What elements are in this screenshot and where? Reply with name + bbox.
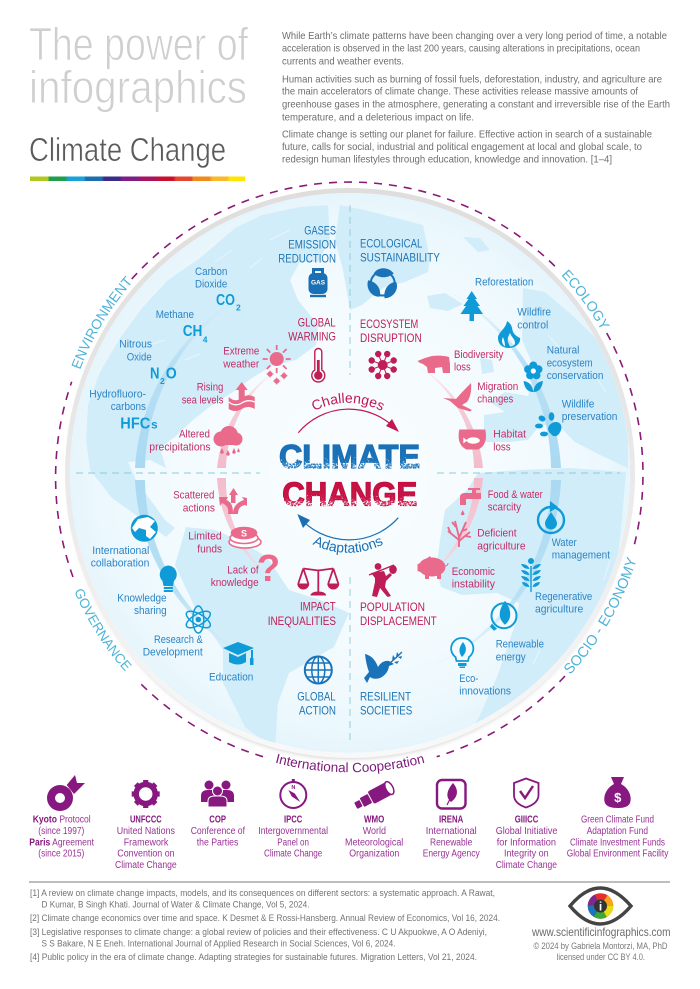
challenge: biodiversity loss: Biodiversity (454, 349, 504, 361)
quadrant heading: gases emission reduction: EMISSION (288, 238, 336, 252)
adaptation: knowledge sharing: Knowledge (117, 592, 167, 604)
gas label: nitrous oxide: Oxide (127, 351, 152, 363)
challenge: migration changes: Migration (477, 381, 518, 393)
icon: rising water (229, 382, 255, 411)
quadrant heading: global action: GLOBAL (297, 690, 336, 704)
organisation: COP (191, 780, 245, 848)
quadrant heading: gases emission reduction (278, 223, 336, 266)
organisation: climate funds (567, 777, 668, 860)
icon: rain cloud (214, 426, 242, 456)
quadrant heading: impact inequalities: INEQUALITIES (268, 614, 336, 628)
gas label: nitrous oxide: N (150, 365, 160, 382)
icon: money bag: $ (614, 790, 622, 805)
icon: graduation cap (223, 642, 254, 665)
pink challenge ring (217, 363, 483, 588)
text: UNFCCC: UNFCCC (130, 815, 162, 826)
adaptation: research and development (143, 634, 203, 659)
text: climate funds: Global Environment Facility (567, 849, 668, 860)
references: [2] Climate change economics over time and space. K Desmet & E Rossi-Hansberg. Annual Review of Economics, Vol 16, 2024. (30, 913, 500, 924)
gas label: carbon dioxide (195, 266, 241, 313)
icon: stacked coins: S (241, 528, 247, 538)
credit text: © 2024 by Gabriela Montorzi, MA, PhD (534, 941, 668, 952)
icon: telescope (352, 780, 396, 812)
text: Kyoto (29, 815, 94, 860)
introduction text: Human activities such as burning of fossil fuels, deforestation, industry, and agriculture are (282, 74, 662, 85)
challenge: extreme weather: weather (222, 358, 260, 370)
challenge: scattered actions: Scattered (173, 490, 214, 502)
challenge: deficient agriculture (477, 528, 526, 552)
gas label: nitrous oxide: 2 (160, 376, 165, 386)
quadrant heading: global warming: WARMING (288, 329, 336, 343)
adaptation: wildlife preservation (562, 398, 617, 423)
challenge: lack of knowledge: Lack of (227, 564, 259, 576)
adaptation: natural ecosystem conservation (547, 345, 603, 382)
adaptation: renewable energy: Renewable (496, 638, 544, 650)
challenge: habitat loss: loss (493, 441, 511, 453)
quadrant heading: impact inequalities (268, 600, 336, 628)
text: WMO (345, 815, 403, 860)
adaptation: wildlife preservation: preservation (562, 411, 617, 423)
title: infographics (29, 61, 247, 113)
icon: light bulb (160, 566, 177, 592)
ring label: international cooperation: International Cooperation (276, 754, 424, 774)
text: GIIICC: Climate Change (496, 860, 557, 871)
icon: flame (498, 321, 520, 348)
challenge: limited funds (188, 531, 223, 555)
text: IPCC: Intergovernmental (258, 826, 328, 837)
organisation: GIIICC (496, 778, 558, 871)
text: UNFCCC: Convention on (117, 849, 175, 860)
adaptation: water management (552, 537, 610, 562)
challenge: economic instability (452, 566, 496, 591)
text: IRENA: Renewable (430, 837, 473, 848)
adaptation: education: Education (209, 671, 253, 683)
gas label: nitrous oxide (119, 339, 177, 386)
credit text: licensed under CC BY 4.0. (557, 952, 645, 963)
quadrant heading: resilient societies: RESILIENT (360, 690, 412, 704)
adaptation: renewable energy: energy (496, 651, 526, 663)
adaptation: regenerative agriculture: Regenerative (535, 591, 592, 603)
icon: water cycle (538, 501, 564, 533)
challenge: scattered actions: actions (183, 502, 216, 514)
gas label: carbon dioxide: Dioxide (195, 279, 227, 291)
text: IPCC: Panel on (277, 837, 309, 848)
quadrant heading: population displacement: DISPLACEMENT (360, 614, 437, 628)
organisation: WMO (345, 780, 403, 860)
title (29, 18, 248, 113)
quadrant heading: global warming: GLOBAL (298, 316, 336, 330)
text: IPCC: Climate Change (264, 849, 323, 860)
quadrant heading: ecological sustainability: SUSTAINABILITY (360, 251, 440, 265)
challenge: lack of knowledge: knowledge (211, 577, 259, 589)
organisation: UNFCCC (115, 774, 177, 871)
gas label: nitrous oxide: Nitrous (119, 339, 153, 351)
icon: shield with check (514, 778, 538, 808)
credit text: www.scientificinfographics.com (531, 925, 670, 939)
gas label: hydrofluorocarbons (89, 388, 158, 432)
challenge: biodiversity loss: loss (454, 362, 471, 374)
adaptation: water management: management (552, 550, 610, 562)
organisation: Kyoto and Paris (29, 775, 94, 860)
international cooperation row (29, 774, 668, 871)
globe rim (68, 190, 632, 756)
icon: polar bear (418, 356, 450, 373)
icon: stacked coins (229, 528, 261, 548)
quadrant heading: ecosystem disruption (360, 317, 422, 345)
challenge: food and water scarcity (488, 489, 543, 514)
text: Kyoto: (since 2015) (38, 849, 84, 860)
icon: eco light bulb (451, 638, 473, 668)
adaptation: reforestation: Reforestation (475, 277, 533, 289)
quadrant heading: resilient societies: SOCIETIES (360, 704, 412, 718)
icon: thermometer (312, 348, 325, 382)
introduction text: acceleration is observed in the last 200 years, causing alterations in precipitations, ocean (282, 44, 640, 55)
header: title block (29, 18, 248, 181)
challenge: altered precipitations (149, 429, 211, 454)
adaptation: international collaboration: collaboration (91, 558, 149, 570)
text: IRENA (423, 815, 480, 860)
centre: climate change wordmark (279, 392, 420, 555)
globe panel (68, 190, 632, 759)
globe drop shadow (69, 197, 631, 759)
text: IRENA: IRENA (439, 815, 463, 826)
ring label: environment: ENVIRONMENT (72, 276, 131, 369)
icon: world grid globe (305, 656, 332, 684)
icon: peace dove (364, 652, 402, 683)
logo: eye (570, 888, 631, 924)
quadrant heading: ecological sustainability: ECOLOGICAL (360, 237, 423, 251)
challenge: migration changes (477, 381, 518, 406)
gas label: hydrofluorocarbons: s (151, 417, 158, 431)
challenge: altered precipitations: precipitations (149, 442, 211, 454)
text: IRENA: Energy Agency (423, 849, 480, 860)
icon: piggy bank (418, 556, 448, 579)
references: S S Bakare, N E Eneh. International Journal of Applied Research in Social Sciences, Vol 6, 2024. (42, 938, 396, 950)
text: COP: COP (209, 815, 226, 826)
adaptations arrow: Adaptations (312, 537, 383, 555)
text: GIIICC: for Information (497, 837, 556, 848)
adaptation: knowledge sharing: sharing (134, 605, 167, 617)
ring label: ecology: ECOLOGY (562, 269, 610, 328)
icon: water tap (460, 488, 481, 515)
text: IPCC: IPCC (284, 815, 302, 826)
adaptation: eco-innovations: Eco- (459, 673, 479, 685)
introduction text: redesign human lifestyles through education, knowledge and innovation. [1–4] (282, 155, 612, 166)
references: [4] Public policy in the era of climate change. Adapting strategies for sustainable futures. Migration Letters, Vol 21, 2024. (30, 952, 477, 963)
icon: compass: N (291, 785, 295, 791)
text: Kyoto: Kyoto Protocol (33, 815, 91, 826)
quadrant heading: impact inequalities: IMPACT (300, 600, 336, 614)
title: The power of (29, 18, 248, 70)
references: [3] Legislative responses to climate change: a global review of policies and their effectiveness. C U Akpuokwe, A O Adeniyi, (30, 927, 487, 938)
challenge: migration changes: changes (477, 394, 514, 406)
quadrant heading: global warming (288, 316, 336, 343)
text: WMO: WMO (364, 815, 385, 826)
icon: pine tree (460, 291, 483, 321)
adaptation: natural ecosystem conservation: Natural (547, 345, 579, 357)
rainbow bar (30, 176, 245, 181)
text: Kyoto: (since 1997) (38, 826, 84, 837)
challenge: limited funds: funds (197, 543, 223, 555)
text: WMO: Organization (349, 849, 399, 860)
text: Kyoto: Paris Agreement (29, 837, 94, 848)
quadrant heading: global action: ACTION (299, 704, 336, 718)
adaptation: eco-innovations (459, 673, 512, 697)
icon: ecosystem network (369, 351, 396, 379)
gas label: carbon dioxide: Carbon (195, 266, 227, 278)
icon: gas cylinder (308, 268, 328, 297)
challenge: scattered actions (173, 490, 216, 514)
subtitle: Climate Change (29, 131, 226, 168)
icon: dead tree (448, 521, 471, 547)
adaptation: eco-innovations: innovations (459, 685, 512, 697)
introduction text: While Earth’s climate patterns have been changing over a very long period of time, a notable (282, 31, 667, 42)
quadrant heading: global action (297, 690, 336, 718)
word: climate: CLIMATE (279, 438, 420, 475)
challenges arrow (298, 392, 399, 434)
text: climate funds (567, 815, 668, 860)
adaptation: wildfire control (517, 307, 551, 331)
adaptations arrow (297, 514, 399, 555)
challenge: biodiversity loss (454, 349, 504, 374)
icon: fish bowl (459, 430, 486, 450)
introduction text: greenhouse gases in the atmosphere, generating a constant and irreversible rise of the Earth (282, 100, 670, 111)
quadrant heading: population displacement: POPULATION (360, 600, 425, 614)
globe ocean and land (70, 193, 630, 753)
icon: recycle leaves (364, 268, 400, 301)
adaptation: natural ecosystem conservation: conservation (547, 370, 603, 382)
adaptation: renewable energy (496, 638, 544, 663)
challenge: food and water scarcity: scarcity (488, 502, 522, 514)
adaptation: wildfire control: Wildfire (517, 307, 551, 319)
gas label: carbon dioxide: 2 (236, 303, 241, 313)
icon: diverging arrows (219, 488, 247, 514)
text: UNFCCC: United Nations (117, 826, 175, 837)
adaptation: natural ecosystem conservation: ecosystem (547, 357, 593, 369)
challenge: rising sea levels: sea levels (182, 394, 224, 406)
logo: eye: i (599, 900, 602, 914)
quadrant heading: ecological sustainability (360, 237, 440, 265)
quadrant heading: ecosystem disruption: DISRUPTION (360, 331, 422, 345)
references: D Kumar, B Singh Khati. Journal of Water & Climate Change, Vol 5, 2024. (42, 900, 310, 910)
challenge: rising sea levels (182, 381, 224, 406)
credit text (531, 925, 670, 963)
gas label: methane: Methane (156, 309, 194, 321)
adaptation: wildlife preservation: Wildlife (562, 398, 594, 410)
gas label: methane: 4 (203, 334, 208, 344)
introduction text: Climate change is setting our planet for failure. Effective action in search of a sustainable (282, 129, 652, 140)
adaptation: international collaboration (91, 545, 149, 570)
challenge: extreme weather (222, 346, 260, 370)
blue adaptation ring (135, 285, 561, 670)
text: WMO: Meteorological (345, 837, 403, 848)
icon: scales of justice (297, 568, 339, 596)
gas label: hydrofluorocarbons: Hydrofluoro- (89, 388, 146, 400)
text: COP (191, 815, 245, 848)
challenge: habitat loss: Habitat (493, 429, 526, 441)
ring label: governance: GOVERNANCE (76, 589, 132, 672)
introduction text: the main accelerators of climate change. These activities release massive amounts of (282, 87, 638, 98)
challenges arrow: Challenges (312, 392, 384, 410)
quadrant heading: ecosystem disruption: ECOSYSTEM (360, 317, 418, 331)
icon: medal (47, 775, 85, 811)
icon: renewable energy leaf (490, 601, 516, 631)
challenge: extreme weather: Extreme (223, 346, 259, 358)
text: GIIICC (496, 815, 558, 871)
icon: wheat sprig (521, 558, 541, 592)
ring label: socio-economy: SOCIO - ECONOMY (564, 556, 636, 674)
icon: flying bird (443, 383, 472, 412)
text: COP: the Parties (197, 837, 238, 848)
gas label: carbon dioxide: CO (216, 292, 235, 309)
adaptation: research and development: Research & (154, 634, 203, 646)
icon: people (201, 780, 234, 807)
text: UNFCCC (115, 815, 177, 871)
introduction text: currents and weather events. (282, 57, 404, 68)
axis dashes (76, 205, 620, 745)
icon: flower (524, 362, 543, 392)
adaptation: regenerative agriculture (535, 591, 592, 616)
text: GIIICC: Global Initiative (496, 826, 558, 837)
adaptation: regenerative agriculture: agriculture (535, 604, 583, 616)
quadrant heading: gases emission reduction: REDUCTION (278, 252, 336, 266)
icon: gas cylinder: GAS (311, 280, 326, 286)
quadrant heading: gases emission reduction: GASES (304, 223, 336, 237)
challenge: deficient agriculture: Deficient (477, 528, 517, 540)
icon: gear (126, 774, 165, 814)
challenge: food and water scarcity: Food & water (488, 489, 543, 501)
text: UNFCCC: Framework (124, 837, 168, 848)
challenge: economic instability: Economic (452, 566, 496, 578)
icon: hiker with bundle (369, 563, 397, 597)
text: GIIICC: Integrity on (504, 849, 549, 860)
references: [1] A review on climate change impacts, models, and its consequences on different sectors: a systematic approach. A Rawat, (30, 888, 495, 899)
icon: atom (184, 606, 213, 633)
gas label: methane: CH (183, 323, 202, 340)
text: climate funds: Green Climate Fund (581, 815, 654, 826)
gas label: hydrofluorocarbons: carbons (111, 401, 147, 413)
icon: leaf in square (437, 780, 466, 808)
gas label: methane (156, 309, 208, 344)
icon: paw print (535, 412, 561, 436)
adaptation: knowledge sharing (117, 592, 167, 617)
challenge: altered precipitations: Altered (179, 429, 210, 441)
organisation: IRENA (423, 780, 480, 860)
adaptation: water management: Water (552, 537, 577, 549)
organisation: IPCC (258, 779, 328, 860)
text: GIIICC: GIIICC (515, 815, 538, 826)
icon: earth (131, 515, 158, 542)
word: change: CHANGE (282, 476, 417, 512)
text: IPCC (258, 815, 328, 860)
gas label: nitrous oxide: O (166, 365, 177, 382)
adaptation: research and development: Development (143, 647, 203, 659)
icon: question mark: ? (257, 548, 280, 590)
icon: sun and snow (263, 345, 291, 384)
references (30, 888, 500, 963)
introduction text (282, 31, 670, 166)
quadrant heading: resilient societies (360, 690, 412, 718)
challenge: lack of knowledge (211, 564, 259, 589)
text: climate funds: Climate Investment Funds (570, 837, 665, 848)
quadrant heading: population displacement (360, 600, 437, 628)
text: climate funds: Adaptation Fund (587, 826, 648, 837)
text: IRENA: International (426, 826, 477, 837)
challenge: deficient agriculture: agriculture (477, 540, 526, 552)
challenge: habitat loss (493, 429, 526, 453)
text: COP: Conference of (191, 826, 245, 837)
adaptation: international collaboration: International (92, 545, 149, 557)
challenge: limited funds: Limited (188, 531, 222, 543)
introduction text: future, calls for social, industrial and political engagement at local and global scale, to (282, 142, 642, 153)
challenge: economic instability: instability (452, 579, 496, 591)
adaptation: wildfire control: control (517, 319, 548, 331)
outer dashed ring (56, 182, 643, 757)
gas label: hydrofluorocarbons: HFC (120, 415, 150, 432)
text: UNFCCC: Climate Change (115, 860, 177, 871)
challenge: rising sea levels: Rising (197, 381, 223, 393)
text: WMO: World (363, 826, 386, 837)
introduction text: temperature, and a deleterious impact on life. (282, 112, 474, 123)
